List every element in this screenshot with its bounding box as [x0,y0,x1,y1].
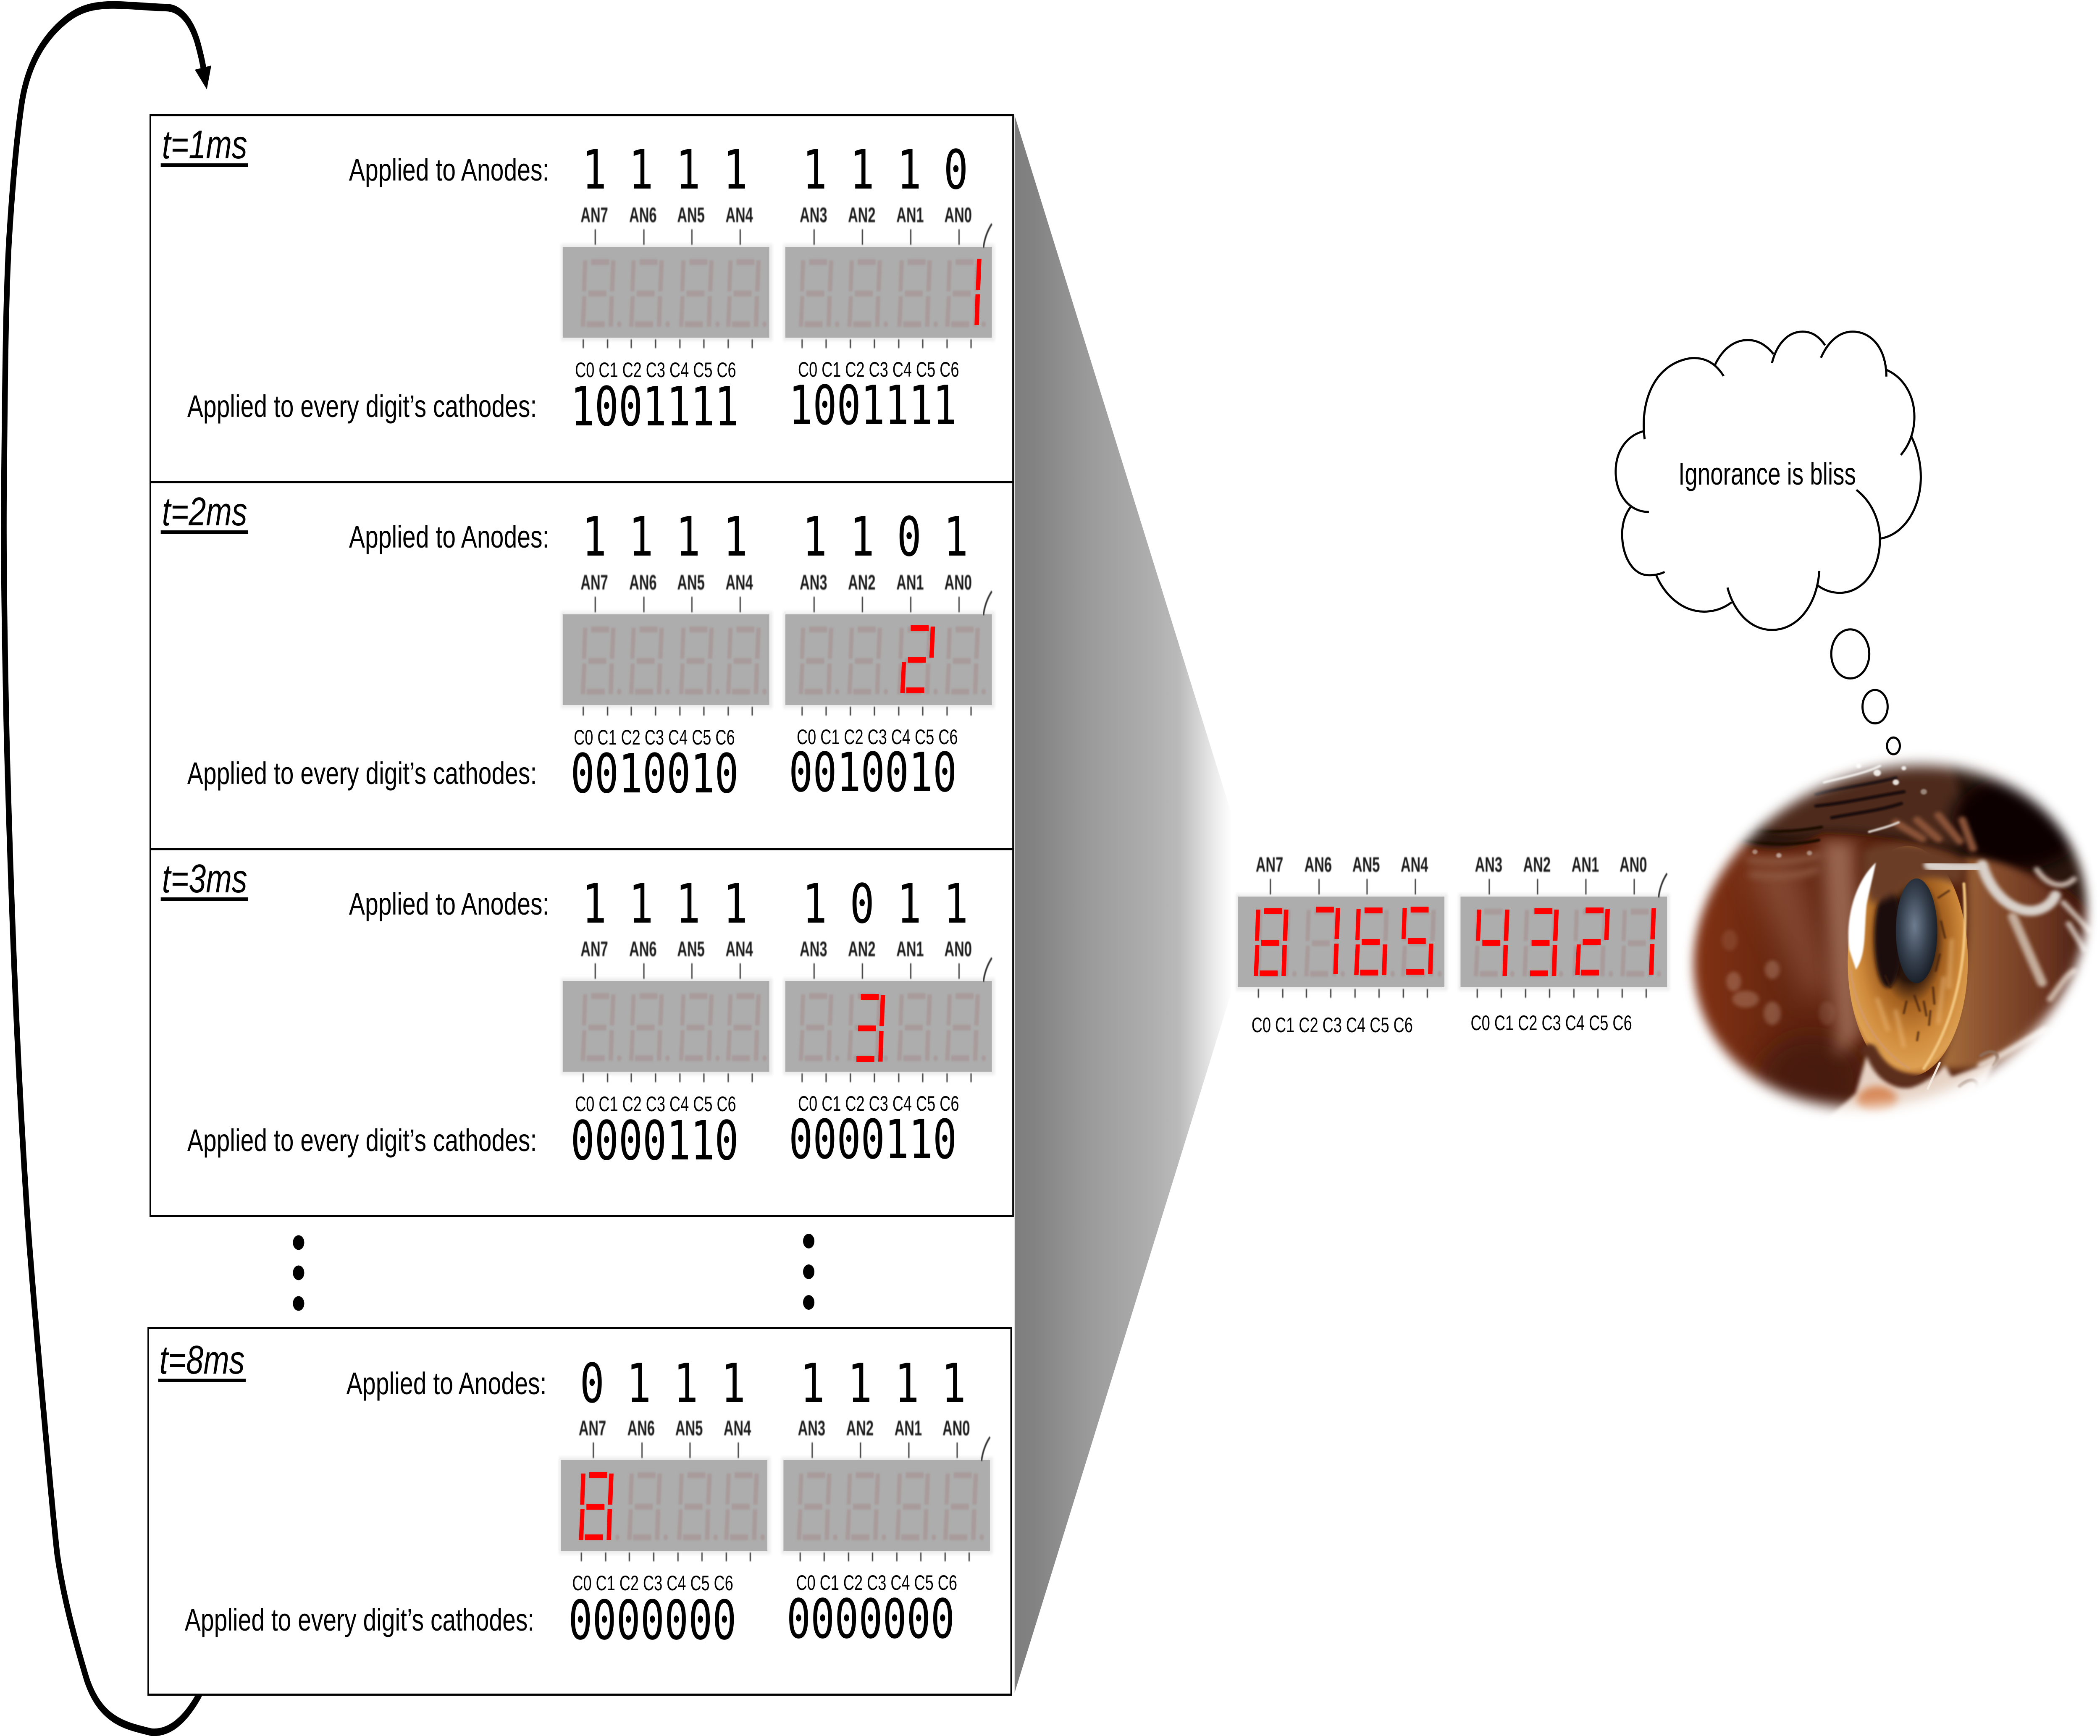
anode label: Applied to Anodes: [349,519,549,554]
cathode values [571,1108,957,1172]
display showing 2 [561,571,995,749]
anode label: Applied to Anodes: [349,152,549,187]
display showing 1: AN3 [800,204,827,227]
cathode values [568,1587,955,1652]
panel: t=2ms [150,482,1013,849]
heading: t=3ms: t=3ms [162,856,247,901]
anode values: 11111101 [582,505,968,569]
display showing 2: AN2 [848,571,876,594]
display showing 3: AN6 [629,938,657,961]
display showing 3: AN3 [800,938,827,961]
display showing 2: AN1 [896,571,924,594]
perceived display: 8765 4321: AN6 [1305,853,1332,876]
cathode label: Applied to every digit’s cathodes: [185,1602,534,1637]
cathode values [571,374,957,438]
anode values: 11111110 [582,138,968,202]
display showing 8: C0 C1 C2 C3 C4 C5 C6 [572,1572,733,1595]
arrow: repeat loop back to first frame [4,5,211,1732]
display showing 8: C0 C1 C2 C3 C4 C5 C6 [796,1571,957,1594]
display showing 8: AN2 [846,1417,874,1440]
ellipsis dots: left column [293,1235,304,1311]
display showing 1: AN6 [629,204,657,227]
panel: t=8ms [148,1328,1011,1695]
display showing 2: AN0 [944,571,972,594]
cathode values: 0000110 [789,1108,957,1171]
display showing 3: AN0 [944,938,972,961]
cathode label: Applied to every digit’s cathodes: [187,389,537,424]
perceived display: 8765 4321: AN7 [1256,853,1283,876]
cathode values: 0000000 [568,1589,736,1652]
anode values: 11111011 [582,872,968,936]
display showing 1: AN1 [896,204,924,227]
cathode values: 1001111 [571,375,739,438]
zoom funnel gradient [1015,115,1232,1693]
display showing 2: AN6 [629,571,657,594]
display showing 1: AN5 [677,204,705,227]
display showing 3: C0 C1 C2 C3 C4 C5 C6 [798,1092,959,1115]
perceived display: 8765 4321: C0 C1 C2 C3 C4 C5 C6 [1471,1012,1632,1035]
heading: t=1ms: t=1ms [162,122,247,167]
display showing 2: C0 C1 C2 C3 C4 C5 C6 [574,726,735,749]
perceived display: 8765 4321: AN2 [1523,853,1551,876]
panel: t=3ms [150,849,1013,1216]
display showing 1: AN7 [580,204,608,227]
cathode label: Applied to every digit’s cathodes: [187,756,537,791]
display showing 8: AN3 [798,1417,825,1440]
display showing 2: AN7 [580,571,608,594]
cathode label: Applied to every digit’s cathodes: [187,1123,537,1158]
display showing 8: AN5 [675,1417,703,1440]
display showing 1 [561,204,995,382]
perceived display: 8765 4321: C0 C1 C2 C3 C4 C5 C6 [1252,1014,1413,1037]
perceived display: 8765 4321: AN0 [1620,853,1647,876]
cathode values: 0010010 [571,742,739,805]
display showing 8: AN1 [895,1417,922,1440]
display showing 3: AN2 [848,938,876,961]
thought cloud [1616,332,1921,754]
cathode values: 0000000 [787,1587,955,1651]
display showing 8: AN0 [942,1417,970,1440]
display showing 2: C0 C1 C2 C3 C4 C5 C6 [797,726,958,749]
display showing 3: AN4 [725,938,753,961]
cathode values: 0010010 [789,741,957,804]
display showing 1: AN2 [848,204,876,227]
display showing 1: C0 C1 C2 C3 C4 C5 C6 [575,359,736,382]
cathode values [571,741,957,805]
cloud text: Ignorance is bliss [1678,456,1856,491]
display showing 1: C0 C1 C2 C3 C4 C5 C6 [798,358,959,381]
display showing 2: AN5 [677,571,705,594]
display showing 3 [561,938,995,1116]
perceived display: 8765 4321: AN5 [1352,853,1380,876]
display showing 8: AN6 [627,1417,655,1440]
display showing 1: AN4 [725,204,753,227]
perceived display: 8765 4321 [1236,853,1670,1037]
perceived display: 8765 4321: AN3 [1475,853,1502,876]
display showing 8 [559,1417,993,1595]
cathode values: 1001111 [789,374,957,437]
eye illustration [1685,754,2095,1116]
cathode values: 0000110 [571,1109,739,1172]
display showing 8: AN4 [724,1417,751,1440]
display showing 8: AN7 [579,1417,606,1440]
anode label: Applied to Anodes: [349,886,549,921]
perceived display: 8765 4321: AN4 [1401,853,1428,876]
anode label: Applied to Anodes: [346,1366,547,1401]
perceived display: 8765 4321: AN1 [1572,853,1599,876]
anode values: 01111111 [580,1352,966,1415]
heading: t=8ms: t=8ms [160,1337,245,1382]
display showing 3: AN5 [677,938,705,961]
display showing 1: AN0 [944,204,972,227]
ellipsis dots: right column [803,1234,814,1310]
heading: t=2ms: t=2ms [162,489,247,534]
display showing 3: AN7 [580,938,608,961]
display showing 2: AN4 [725,571,753,594]
display showing 3: AN1 [896,938,924,961]
panel: t=1ms [150,115,1013,482]
display showing 2: AN3 [800,571,827,594]
display showing 3: C0 C1 C2 C3 C4 C5 C6 [575,1093,736,1116]
